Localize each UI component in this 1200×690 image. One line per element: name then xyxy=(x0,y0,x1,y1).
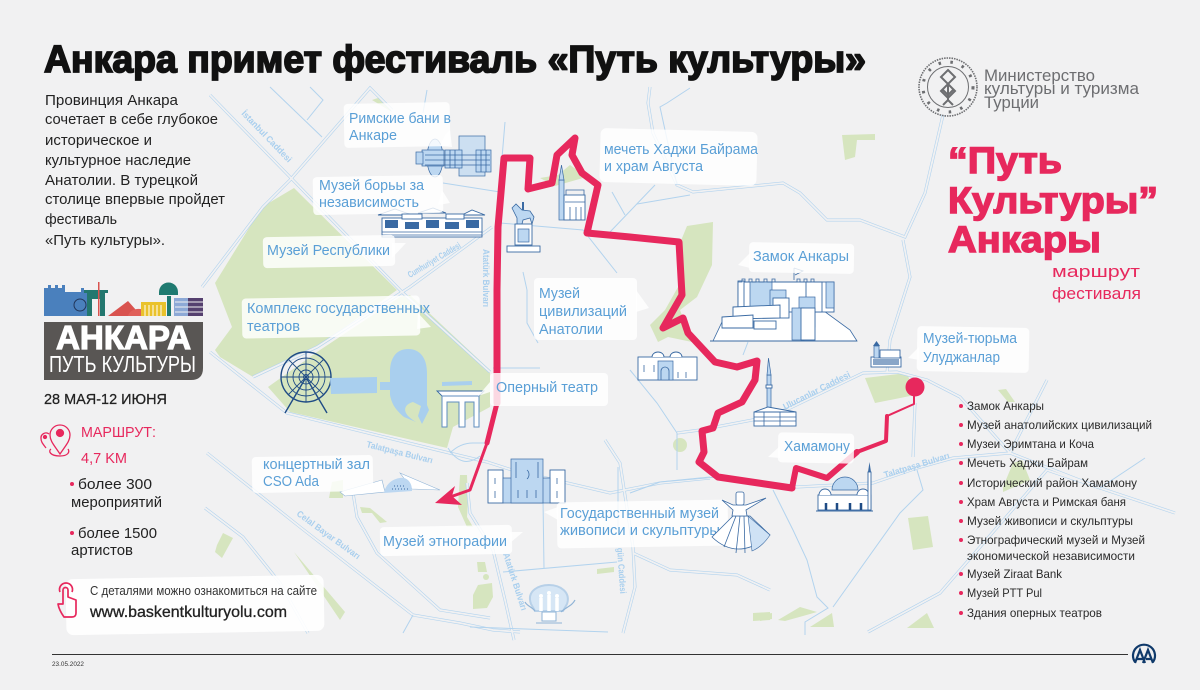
label: Anatolian civilizations museum: Анатолии xyxy=(539,321,603,338)
label: Haci Bayram mosque xyxy=(599,128,759,186)
icon: ethnography museum xyxy=(488,459,565,503)
website callout xyxy=(58,575,324,635)
publication date: 23.05.2022 xyxy=(52,661,84,668)
label: Hamamonu: Хамамону xyxy=(784,438,850,455)
festival facts: артистов xyxy=(71,542,133,559)
label: State theatres complex xyxy=(242,295,431,339)
label: CSO Ada: CSO Ada xyxy=(263,473,320,490)
icon: whirling dervish xyxy=(712,492,770,553)
label: Ankara castle xyxy=(738,242,854,274)
icon: Independence museum xyxy=(378,208,485,237)
label: Painting and sculpture museum: живописи и скульптуры xyxy=(560,522,720,539)
label: Hamamonu xyxy=(768,432,854,464)
intro text block: Анатолии. В турецкой xyxy=(45,172,198,189)
intro text block: культурное наследие xyxy=(45,152,191,169)
icon: AA agency logo xyxy=(1133,645,1155,663)
icon: map pins xyxy=(41,425,70,456)
icon: CSO Ada concert hall xyxy=(340,473,440,496)
label: Ulucanlar prison museum xyxy=(908,326,1029,373)
label: Anatolian civilizations museum xyxy=(534,278,649,340)
festival logo: Ankara culture road: ПУТЬ КУЛЬТУРЫ xyxy=(49,351,196,377)
ministry emblem xyxy=(919,58,977,116)
map: street names: Atatürk Bulvarı xyxy=(481,249,491,307)
label: Roman baths: Римские бани в xyxy=(349,110,451,127)
intro text block: сочетает в себе глубокое xyxy=(45,111,218,128)
icon: ferris wheel xyxy=(281,352,331,413)
icon: Ulucanlar prison xyxy=(871,341,901,367)
label: Opera theatre xyxy=(478,373,608,406)
intro text block: фестиваль xyxy=(45,211,117,228)
list of route stops xyxy=(959,399,1152,620)
route heading: Культуры” xyxy=(948,180,1158,221)
route heading: Анкары xyxy=(948,219,1101,260)
label: Painting and sculpture museum: Государственный музей xyxy=(560,505,719,522)
list of route stops: Музей живописи и скульптуры xyxy=(967,514,1133,528)
label: Independence museum: независимость xyxy=(319,194,419,211)
label: Independence museum xyxy=(313,175,450,215)
list of route stops: Этнографический музей и Музей xyxy=(967,533,1145,547)
festival logo: Ankara culture road: АНКАРА xyxy=(56,319,191,356)
map: street names: Ulucanlar Caddesi xyxy=(781,369,852,412)
list of route stops: экономической независимости xyxy=(967,549,1135,563)
map: street names: Talatpaşa Bulvarı xyxy=(883,450,951,480)
intro text block xyxy=(45,92,225,249)
list of route stops: Музей Ziraat Bank xyxy=(967,567,1063,581)
label: Haci Bayram mosque: мечеть Хаджи Байрама xyxy=(604,141,759,158)
label: Painting and sculpture museum xyxy=(544,500,728,548)
list of route stops: Храм Августа и Римская баня xyxy=(967,495,1126,509)
map: street names: Atatürk Bulvarı xyxy=(501,552,529,612)
route length: 4,7 KM xyxy=(81,450,127,467)
icon: Kocatepe-style minaret xyxy=(754,358,796,426)
festival facts: мероприятий xyxy=(71,494,162,511)
map: double-line roads xyxy=(202,87,1175,640)
route heading xyxy=(948,140,1158,260)
label: Haci Bayram mosque: и храм Августа xyxy=(604,158,704,175)
list of route stops: Исторический район Хамамону xyxy=(967,476,1137,490)
map: street names: Talatpaşa Bulvarı xyxy=(366,439,434,465)
icon: tapping hand xyxy=(58,583,76,617)
intro text block: столице впервые пройдет xyxy=(45,191,225,208)
intro text block: Провинция Анкара xyxy=(45,92,179,109)
route heading: “Путь xyxy=(948,140,1062,181)
map: thin roads xyxy=(270,87,1145,635)
map: street names: İstanbul Caddesi xyxy=(240,108,294,164)
icon: Roman baths plan xyxy=(416,136,491,177)
ministry name: Министерство xyxy=(984,67,1095,85)
list of route stops: Здания оперных театров xyxy=(967,606,1102,620)
route length xyxy=(81,424,156,467)
route subheading xyxy=(1052,263,1141,303)
label: Republic museum: Музей Республики xyxy=(267,242,390,259)
list of route stops: Музей PTT Pul xyxy=(967,586,1042,600)
label: Independence museum: Музей борьы за xyxy=(319,177,425,194)
list of route stops: Музей анатолийских цивилизаций xyxy=(967,418,1152,432)
label: Ulucanlar prison museum: Улуджанлар xyxy=(923,349,1000,366)
icon: Haci Bayram mosque and Augustus temple xyxy=(559,165,585,220)
title: Анкара примет фестиваль «Путь культуры» xyxy=(44,39,866,81)
list of route stops: Мечеть Хаджи Байрам xyxy=(967,456,1088,470)
label: Ankara castle: Замок Анкары xyxy=(753,248,849,265)
icon: monumental arch xyxy=(437,391,484,427)
footer rule xyxy=(52,654,1128,655)
icon: Ankara castle xyxy=(710,268,857,341)
icon: state theatres pool xyxy=(330,349,472,424)
label: State theatres complex: Комплекс государственных xyxy=(247,300,430,317)
label: Roman baths xyxy=(344,102,452,148)
website callout: www.baskentkulturyolu.com xyxy=(89,604,287,621)
label: Ethnography museum: Музей этнографии xyxy=(383,533,507,550)
date range: 28 МАЯ-12 ИЮНЯ xyxy=(44,391,167,408)
route subheading: фестиваля xyxy=(1052,285,1141,303)
list of route stops: Замок Анкары xyxy=(967,399,1044,413)
icon: Hamamonu mosque xyxy=(816,462,873,511)
map: street names: Celal Bayar Bulvarı xyxy=(295,509,362,561)
label: CSO Ada: концертный зал xyxy=(263,456,370,473)
icon: park monument xyxy=(525,585,575,623)
festival facts: более 300 xyxy=(78,476,152,493)
label: Roman baths: Анкаре xyxy=(349,127,397,144)
map: green parks xyxy=(215,97,1030,628)
map: street names: gün Caddesi xyxy=(615,547,628,594)
label: Republic museum xyxy=(263,235,406,268)
route length: МАРШРУТ: xyxy=(81,424,156,441)
list of route stops: Музеи Эримтана и Коча xyxy=(967,437,1094,451)
label: Anatolian civilizations museum: Музей xyxy=(539,285,580,302)
label: Anatolian civilizations museum: цивилизаций xyxy=(539,303,627,320)
icon: Anatolian civilizations museum xyxy=(638,352,697,380)
intro text block: историческое и xyxy=(45,132,152,149)
website callout: С деталями можно ознакомиться на сайте xyxy=(90,583,317,598)
label: Ulucanlar prison museum: Музей-тюрьма xyxy=(923,330,1018,347)
ministry name: культуры и туризма xyxy=(984,80,1140,98)
label: Ethnography museum xyxy=(380,525,523,556)
ministry name xyxy=(984,67,1140,112)
festival facts: более 1500 xyxy=(78,525,157,542)
map: street names xyxy=(240,108,951,612)
route line xyxy=(435,138,924,505)
festival facts xyxy=(70,476,162,559)
label: Opera theatre: Оперный театр xyxy=(496,379,598,396)
icon: equestrian statue xyxy=(507,202,540,252)
intro text block: «Путь культуры». xyxy=(45,232,165,249)
festival logo: Ankara culture road xyxy=(44,282,203,380)
map: street names: Cumhuriyet Caddesi xyxy=(406,240,462,280)
label: State theatres complex: театров xyxy=(247,318,300,335)
label: CSO Ada xyxy=(252,455,373,493)
route subheading: маршрут xyxy=(1052,263,1141,281)
ministry name: Турции xyxy=(984,94,1039,112)
